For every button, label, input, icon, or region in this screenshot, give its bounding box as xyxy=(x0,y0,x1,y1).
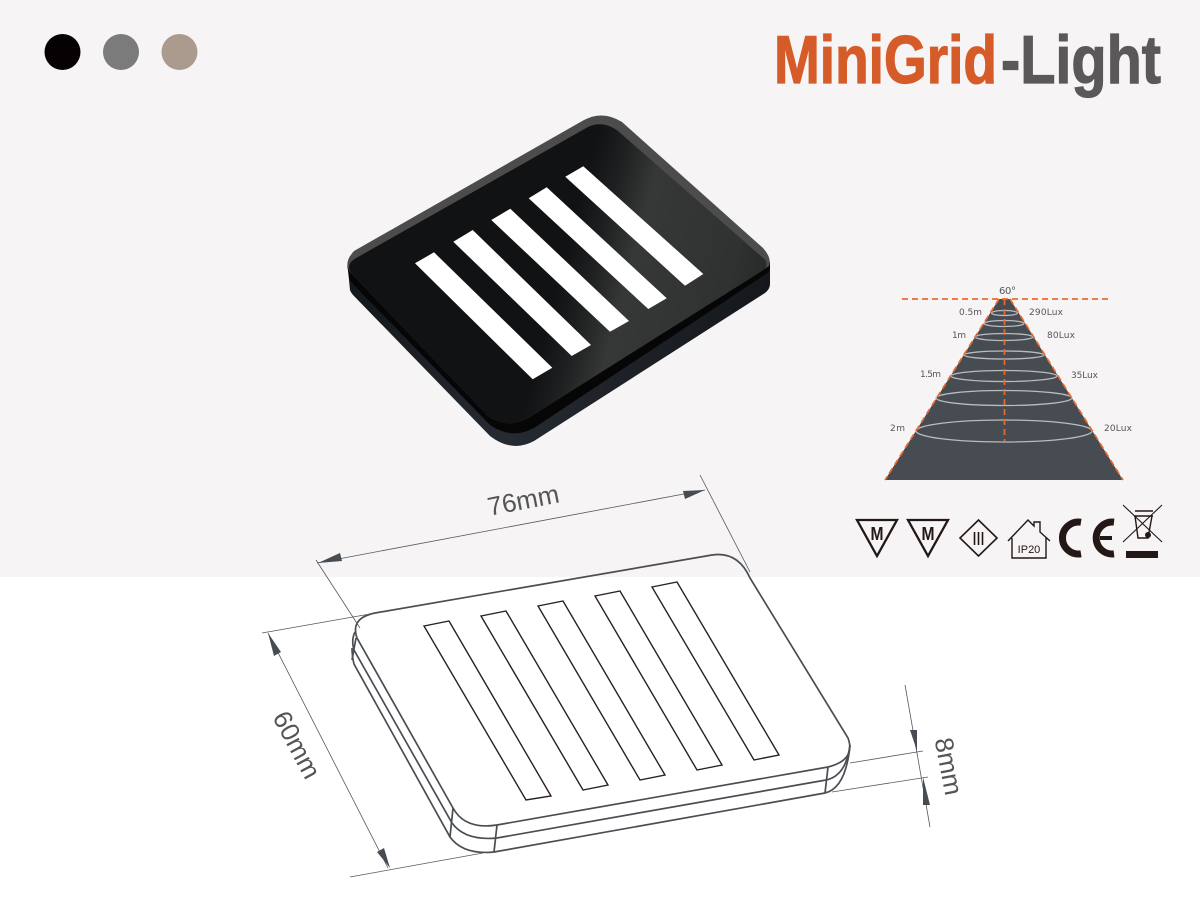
beam labels: 20Lux xyxy=(1104,424,1133,434)
product render: black light fixture xyxy=(348,115,770,446)
light stripes xyxy=(415,166,703,379)
background: upper grey panel xyxy=(0,0,1200,577)
dimension: height 8mm: 8mm xyxy=(929,735,969,798)
beam labels: 35Lux xyxy=(1071,371,1099,381)
beam labels: 0.5m xyxy=(959,308,982,318)
icon: IP20 house: IP20 xyxy=(1018,544,1040,556)
icon: IP20 house xyxy=(1008,520,1050,558)
dimension: depth 60mm xyxy=(262,614,483,877)
orange dashed beam lines xyxy=(885,299,1123,480)
icon: M triangle 2: M xyxy=(922,524,934,544)
black mid band xyxy=(348,254,770,433)
icon: M triangle 2 xyxy=(908,520,948,556)
lower body xyxy=(348,254,770,446)
icon: WEEE crossed bin xyxy=(1123,505,1162,558)
fixture outline xyxy=(352,554,850,852)
icon: class III diamond xyxy=(960,520,997,556)
title xyxy=(774,22,1161,98)
colour swatches xyxy=(44,34,198,70)
icon: M triangle 1 xyxy=(857,520,897,556)
certification icons xyxy=(857,505,1162,558)
icon: CE mark xyxy=(1062,522,1114,554)
glass face xyxy=(349,124,766,423)
glass rim xyxy=(348,115,770,423)
beam angle diagram xyxy=(885,286,1133,480)
title: MiniGrid: MiniGrid xyxy=(774,22,997,98)
title: -Light: -Light xyxy=(1001,22,1161,98)
beam labels: 2 m xyxy=(890,424,905,434)
line drawing with dimensions xyxy=(262,475,969,877)
swatch: black xyxy=(44,34,80,70)
dimension: width 76mm: 76mm xyxy=(485,479,562,522)
icon: M triangle 1: M xyxy=(870,524,884,544)
beam labels: 1 m xyxy=(952,331,966,341)
diffuser slots outline xyxy=(424,582,779,800)
swatch: champagne xyxy=(162,34,198,70)
beam labels: 60° xyxy=(999,286,1016,297)
dimension: height 8mm xyxy=(832,685,969,827)
beam labels: 1.5m xyxy=(920,370,941,380)
light cone xyxy=(885,299,1123,480)
dimension: width 76mm xyxy=(316,475,750,628)
beam labels xyxy=(890,286,1133,434)
dimension: depth 60mm: 60mm xyxy=(267,706,327,784)
swatch: grey xyxy=(103,34,139,70)
illumination rings xyxy=(916,310,1092,442)
beam labels: 80Lux xyxy=(1047,331,1076,341)
beam labels: 290Lux xyxy=(1029,308,1064,318)
